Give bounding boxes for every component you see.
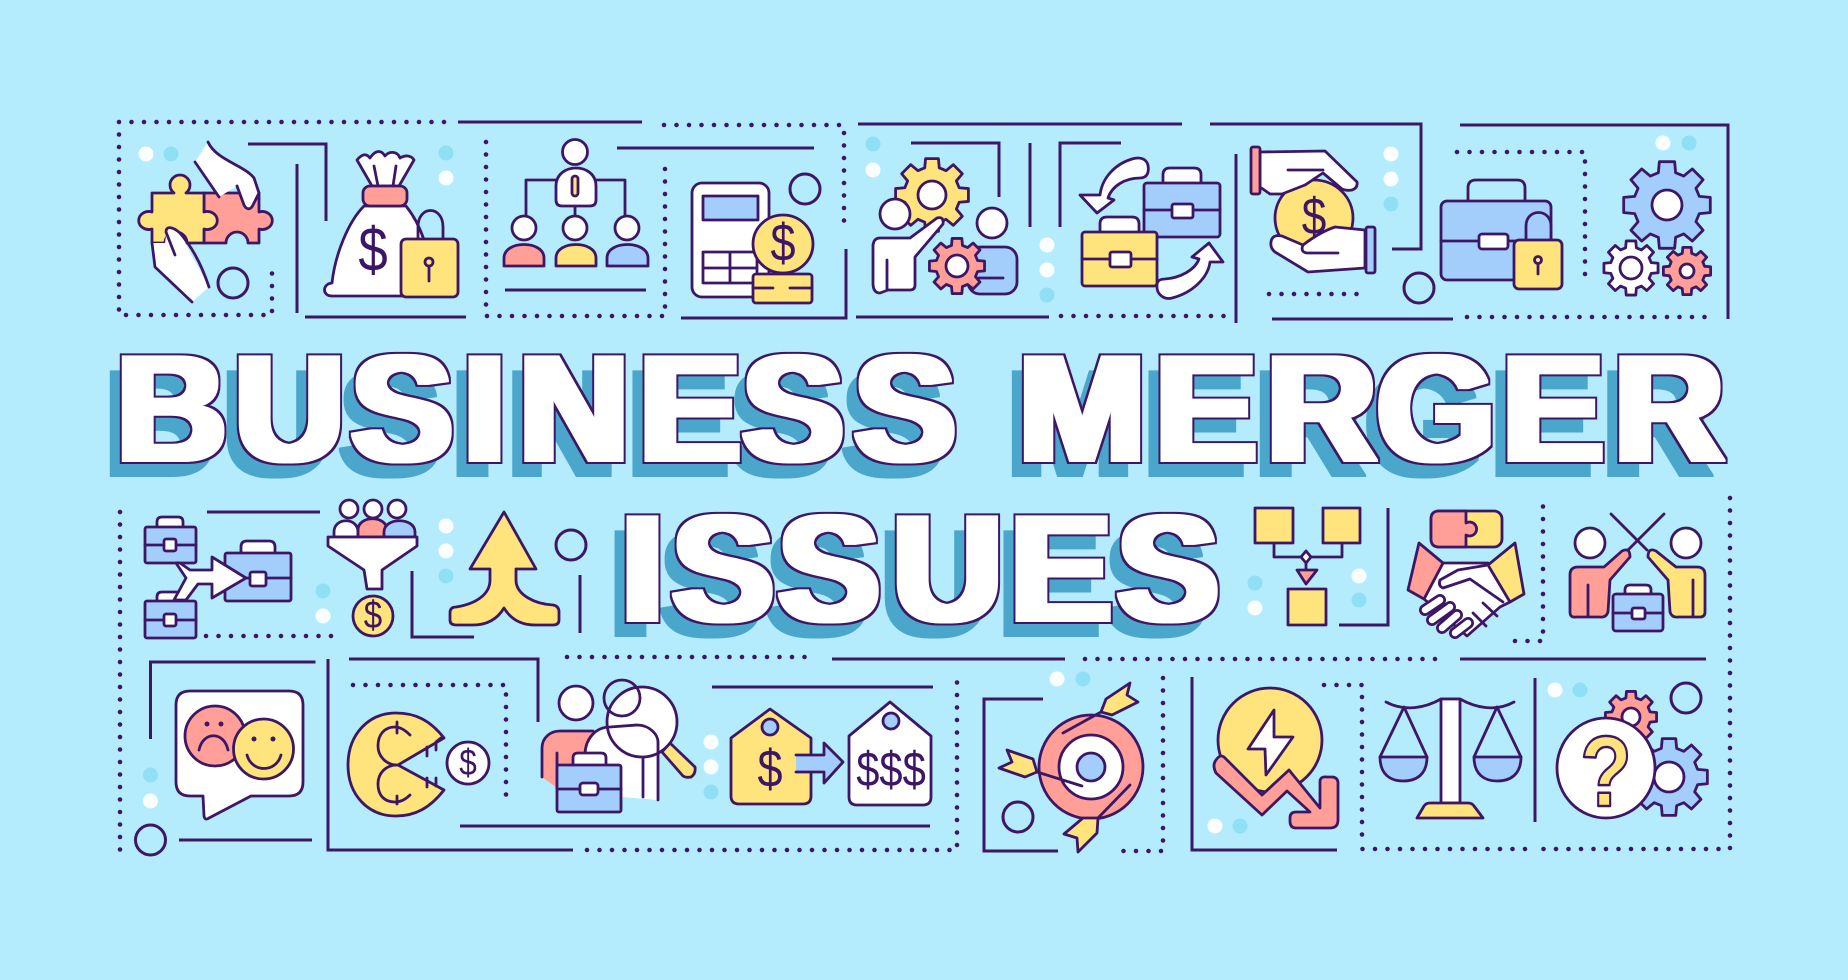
icon: two briefcases merging into one	[145, 517, 291, 638]
icon: question mark with gears: ?	[1580, 715, 1632, 828]
icon: customers in funnel producing a coin: $	[364, 592, 382, 637]
title line 1: BUSINESS MERGER	[117, 324, 1724, 494]
title: business merger issues	[117, 324, 1724, 654]
icon: three gears	[1604, 162, 1711, 295]
icon: target hit by arrows	[999, 683, 1143, 852]
icon: big coin eating a small coin	[348, 713, 489, 816]
icon: people and briefcase under a magnifying glass	[542, 680, 695, 812]
icon: calculator with coin: $	[770, 214, 796, 273]
icon: two paths merging into an upward arrow	[450, 512, 559, 625]
icon: briefcase with padlock	[1441, 180, 1562, 289]
icon: flowchart of three blocks	[1255, 508, 1360, 625]
icon: question mark with gears	[1557, 691, 1707, 828]
icon: two people dueling over a briefcase	[1570, 514, 1705, 631]
icon: price tag rising from one dollar to three dollars: $$$	[856, 742, 926, 797]
title line 2: ISSUES	[621, 484, 1219, 654]
icon: swapping briefcases with arrows	[1080, 158, 1223, 298]
icon: price tag rising from one dollar to three dollars	[731, 702, 931, 805]
icon: big coin eating a small coin: $	[459, 743, 477, 784]
icon: power bolt and falling arrow	[1214, 688, 1338, 828]
icon: calculator with coin	[692, 183, 813, 303]
icon: money bag with padlock	[324, 152, 458, 297]
icon: hands exchanging a dollar coin	[1251, 147, 1375, 273]
icon: money bag with padlock: $	[358, 216, 388, 285]
icon: org chart hierarchy	[504, 140, 648, 266]
icon: price tag rising from one dollar to three dollars: $	[757, 740, 783, 799]
icon: balance scales	[1380, 699, 1521, 818]
icon: speech bubble with sad and happy faces	[176, 691, 303, 819]
icon: person adjusting gears	[873, 159, 1017, 294]
icon: puzzle pieces joined by two hands	[139, 142, 272, 302]
icon: handshake under puzzle pieces	[1408, 511, 1524, 636]
icon: hands exchanging a dollar coin: $	[1302, 188, 1326, 246]
icon: customers in funnel producing a coin	[328, 500, 417, 637]
